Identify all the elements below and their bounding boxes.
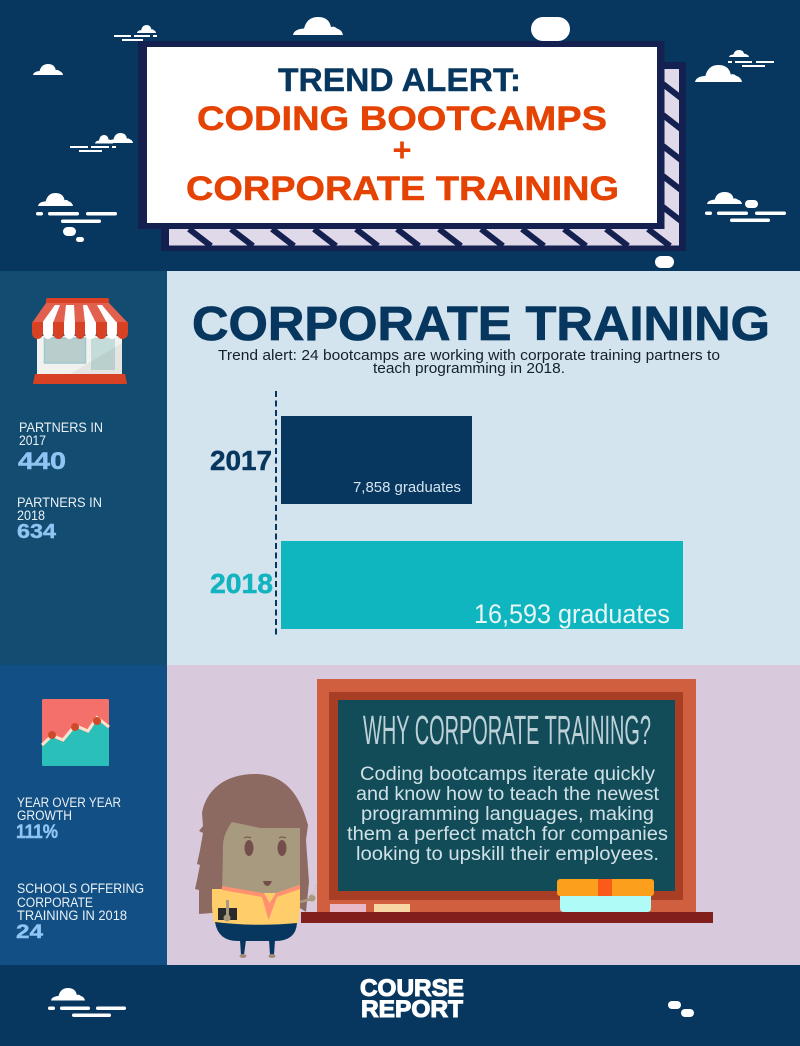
stat: partners in 2018: PARTNERS IN [17, 495, 102, 510]
title line: corporate training: CORPORATE TRAINING [186, 170, 619, 208]
billboard back frame [161, 62, 686, 251]
icon: growth chart [42, 699, 109, 766]
stat: partners in 2017: PARTNERS IN [19, 420, 103, 435]
stat: partners in 2018 [17, 495, 102, 543]
stat: partners in 2017: 440 [18, 448, 66, 475]
stat: partners in 2017: 2017 [19, 433, 46, 448]
logo: course report [360, 975, 464, 1023]
shirt [212, 885, 300, 925]
stat: year over year growth: YEAR OVER YEAR [17, 795, 121, 810]
character: teacher [195, 774, 317, 958]
panel: footer [0, 965, 800, 1046]
bar: 2018 [281, 541, 683, 629]
stat: partners in 2017 [18, 420, 103, 475]
heading: corporate training: CORPORATE TRAINING [192, 298, 770, 351]
chalkboard [301, 679, 713, 923]
chalk pieces [330, 904, 410, 912]
intro text: teach programming in 2018. [373, 361, 565, 377]
body and face [222, 822, 300, 895]
legs and feet [240, 940, 276, 958]
hair fringe [230, 800, 308, 828]
trousers [215, 922, 297, 941]
eyes [244, 837, 286, 856]
chalkboard body text: programming languages, making [361, 804, 654, 825]
eraser [557, 879, 654, 912]
clouds: header left [33, 25, 157, 242]
bar: 2017 [281, 416, 472, 504]
year label: 2017: 2017 [210, 445, 272, 476]
panel: partners sidebar [0, 271, 167, 665]
stat: schools offering corporate training: SCHOOLS OFFERING [17, 881, 144, 896]
stat: schools offering corporate training: TRAINING IN 2018 [17, 908, 127, 923]
title line: plus: + [392, 131, 412, 168]
panel: growth sidebar [0, 665, 167, 965]
intro text: Trend alert: 24 bootcamps are working with corporate training partners to [218, 348, 720, 364]
stat: schools offering corporate training: 24 [16, 922, 44, 943]
logo: course report: REPORT [361, 996, 463, 1023]
clouds: header top and right [293, 17, 786, 268]
chalkboard body text [347, 764, 668, 865]
panel: corporate training chart [167, 271, 800, 665]
chalkboard body text: Coding bootcamps iterate quickly [360, 764, 656, 785]
stat: schools offering corporate training [16, 881, 144, 943]
stat: partners in 2018: 2018 [17, 508, 45, 523]
stat: year over year growth: GROWTH [17, 808, 72, 823]
pointer arm [300, 882, 317, 902]
collar [222, 885, 300, 920]
chalkboard body text: them a perfect match for companies [347, 824, 668, 845]
bar: 2018: 16,593 graduates [474, 599, 670, 629]
year label: 2018: 2018 [210, 568, 273, 599]
stat: year over year growth [16, 795, 121, 843]
badge and arm [218, 900, 237, 922]
stat: partners in 2018: 634 [17, 521, 57, 543]
intro text [218, 348, 720, 377]
stat: year over year growth: 111% [16, 822, 58, 843]
panel: header [33, 17, 786, 268]
billboard front sign [138, 41, 664, 229]
cloud: footer left [48, 988, 126, 1017]
bar: 2017: 7,858 graduates [353, 480, 461, 496]
cloud puffs: footer right [668, 1001, 694, 1017]
hair back [195, 774, 309, 914]
mouth [263, 881, 272, 886]
title line: coding bootcamps: CODING BOOTCAMPS [197, 100, 607, 138]
title line: trend alert: TREND ALERT: [278, 62, 521, 98]
bar chart: graduates [210, 391, 683, 636]
chalkboard body text: and know how to teach the newest [356, 784, 660, 805]
shelf [301, 912, 713, 923]
stat: schools offering corporate training: CORPORATE [17, 895, 93, 910]
panel: why corporate training [167, 665, 800, 965]
chalkboard body text: looking to upskill their employees. [356, 844, 659, 865]
icon: storefront [32, 298, 128, 384]
logo: course report: COURSE [360, 975, 464, 1002]
